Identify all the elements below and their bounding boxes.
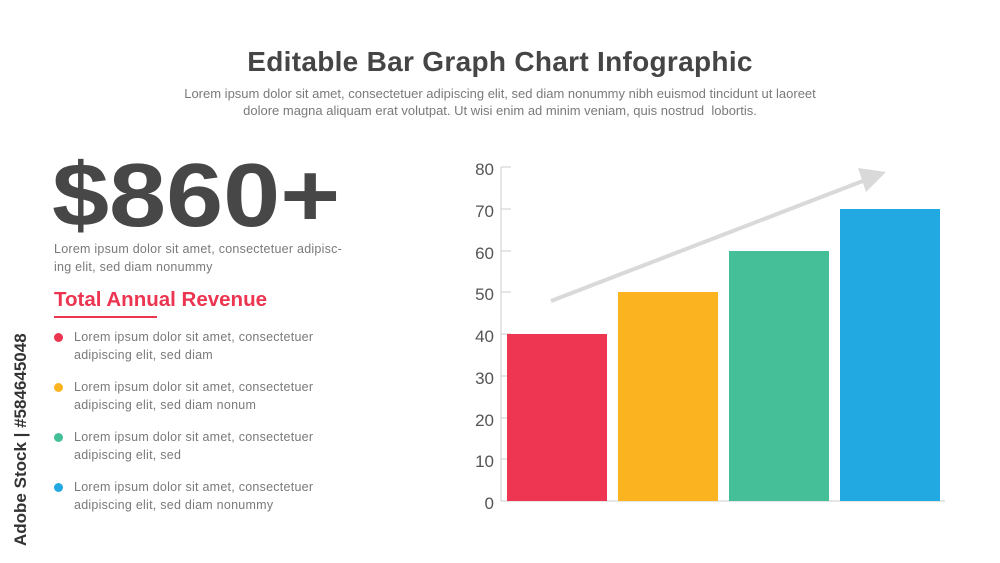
title: Editable Bar Graph Chart Infographic: [247, 46, 753, 77]
bar chart: 30: [475, 369, 494, 388]
bars: [507, 209, 940, 501]
item yellow: [54, 380, 313, 412]
watermark side text: Adobe Stock | #584645048: [11, 333, 30, 546]
bar chart: 40: [475, 327, 494, 346]
item red: [54, 330, 313, 362]
subtitle: Lorem ipsum dolor sit amet, consectetuer adipiscing elit, sed diam nonummy nibh euismod tincidunt ut laoreet: [184, 86, 816, 101]
bar chart: 80: [475, 160, 494, 179]
bar chart: 50: [475, 285, 494, 304]
item green: [54, 430, 313, 462]
subtitle: [184, 86, 816, 118]
item red: Lorem ipsum dolor sit amet, consectetuer: [74, 330, 313, 344]
bar chart: 60: [475, 244, 494, 263]
description: Lorem ipsum dolor sit amet, consectetuer adipisc-: [54, 242, 342, 256]
legend list: [54, 330, 313, 512]
bar chart: 20: [475, 411, 494, 430]
bar chart: 10: [475, 452, 494, 471]
description: [54, 242, 342, 274]
subtitle: dolore magna aliquam erat volutpat. Ut wisi enim ad minim veniam, quis nostrud lobortis.: [243, 103, 757, 118]
description: ing elit, sed diam nonummy: [54, 260, 213, 274]
arrow: [551, 168, 886, 301]
bar chart: 70: [475, 202, 494, 221]
bar chart: [475, 160, 945, 513]
bar chart: 0: [485, 494, 494, 513]
heading: Total Annual Revenue: Total Annual Revenue: [54, 288, 267, 311]
item red: adipiscing elit, sed diam: [74, 348, 213, 362]
item green: Lorem ipsum dolor sit amet, consectetuer: [74, 430, 313, 444]
item blue: Lorem ipsum dolor sit amet, consectetuer: [74, 480, 313, 494]
item blue: [54, 480, 313, 512]
item green: adipiscing elit, sed: [74, 448, 181, 462]
item yellow: adipiscing elit, sed diam nonum: [74, 398, 256, 412]
big number: $860+: [52, 146, 340, 246]
item blue: adipiscing elit, sed diam nonummy: [74, 498, 273, 512]
item yellow: Lorem ipsum dolor sit amet, consectetuer: [74, 380, 313, 394]
